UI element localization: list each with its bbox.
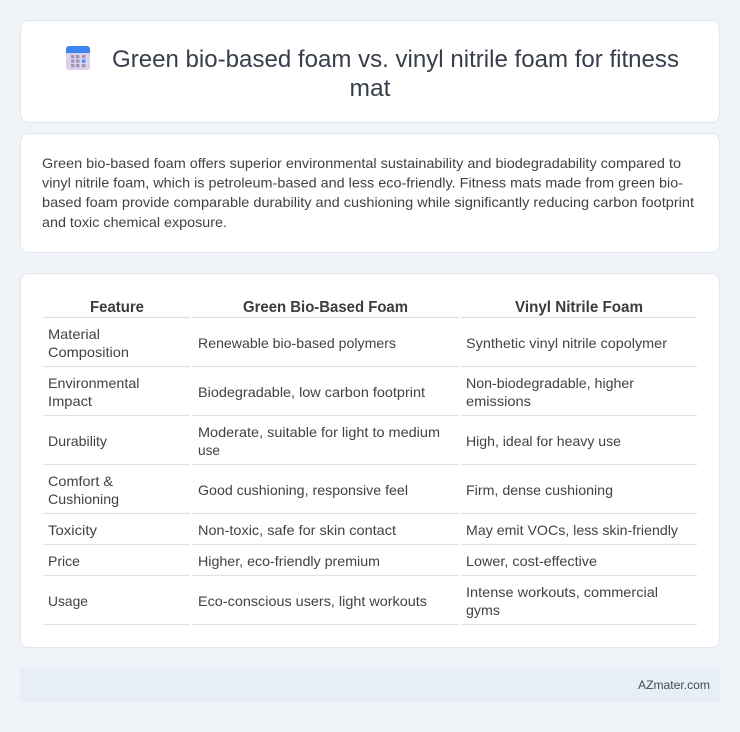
row: durability (43, 424, 697, 464)
row: toxicity: May emit VOCs, less skin-friendly (466, 522, 678, 538)
row: price (43, 553, 697, 576)
row: comfort and cushioning: Good cushioning, responsive feel (198, 482, 408, 498)
row: price: Price (48, 553, 80, 569)
icon: calendar grid (66, 46, 90, 70)
row: comfort and cushioning (43, 473, 697, 514)
footer bar: AZmater.com (638, 678, 710, 692)
row: durability: use (198, 442, 220, 458)
row: price: Higher, eco-friendly premium (198, 553, 380, 569)
row: material composition: Renewable bio-based polymers (198, 335, 396, 351)
title (112, 46, 679, 102)
title: Green bio-based foam vs. vinyl nitrile foam for fitness (112, 46, 679, 73)
row: comfort and cushioning: Firm, dense cushioning (466, 482, 613, 498)
row: environmental impact: Impact (48, 393, 92, 409)
row: toxicity (43, 522, 697, 544)
row: environmental impact: Non-biodegradable, higher (466, 375, 634, 391)
panel: intro summary: and toxic chemical exposure. (42, 214, 227, 230)
panel: comparison table (20, 274, 720, 648)
row: environmental impact: Biodegradable, low carbon footprint (198, 384, 425, 400)
row: comfort and cushioning: Cushioning (48, 491, 119, 507)
row: material composition: Composition (48, 344, 129, 360)
row: material composition (43, 326, 697, 366)
row: toxicity: Non-toxic, safe for skin contact (198, 522, 396, 538)
row: environmental impact (43, 375, 697, 416)
row: usage: Eco-conscious users, light workouts (198, 593, 427, 609)
row: usage: gyms (466, 602, 500, 618)
title: mat (350, 75, 391, 102)
row: usage: Usage (48, 593, 88, 609)
row: material composition: Synthetic vinyl nitrile copolymer (466, 335, 667, 351)
row: usage: Intense workouts, commercial (466, 584, 658, 600)
row: environmental impact: emissions (466, 393, 531, 409)
row: material composition: Material (48, 326, 100, 342)
row: usage (43, 584, 697, 624)
row: price: Lower, cost-effective (466, 553, 597, 569)
panel: title card (20, 20, 720, 122)
row: durability: Durability (48, 433, 107, 449)
row: environmental impact: Environmental (48, 375, 140, 391)
table header row: Vinyl Nitrile Foam (515, 299, 643, 316)
table header row: Feature (90, 299, 144, 316)
row: toxicity: Toxicity (48, 522, 97, 538)
row: durability: High, ideal for heavy use (466, 433, 621, 449)
panel: intro summary: vinyl nitrile foam, which is petroleum-based and less eco-friendly. Fitness mats made from green bio- (42, 175, 683, 191)
row: comfort and cushioning: Comfort & (48, 473, 114, 489)
panel: intro summary (20, 134, 720, 252)
panel: intro summary: Green bio-based foam offers superior environmental sustainability and biodegradability compared to (42, 155, 681, 171)
footer bar (20, 668, 720, 702)
table header row (43, 299, 697, 318)
row: durability: Moderate, suitable for light to medium (198, 424, 440, 440)
table header row: Green Bio-Based Foam (243, 299, 408, 316)
panel: intro summary: based foam provide comparable durability and cushioning while significantly reducing carbon footprint (42, 194, 694, 210)
